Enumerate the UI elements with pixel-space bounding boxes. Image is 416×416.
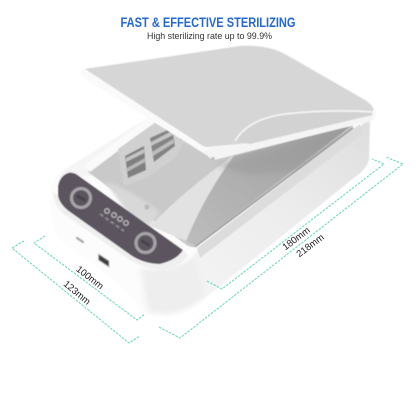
- white upper wall: [84, 116, 156, 172]
- lid curve highlight: [235, 111, 373, 141]
- interior: [88, 118, 362, 258]
- interior back wall and floor: [88, 118, 353, 247]
- dimension: 180mm: 180mm: [281, 225, 313, 253]
- control panel: [53, 173, 188, 269]
- lid white edge: [80, 46, 376, 159]
- device: sterilizer box: [50, 46, 376, 316]
- usb port: [98, 254, 109, 267]
- lid: [80, 46, 376, 160]
- title: FAST & EFFECTIVE STERILIZING: [120, 15, 296, 30]
- shadow under front corner: [140, 258, 205, 314]
- right side wall: [165, 118, 370, 312]
- indicator labels: [100, 214, 124, 231]
- indicator lights: [105, 209, 128, 225]
- compartment slots: [118, 122, 190, 186]
- right button: [136, 234, 155, 252]
- peg: [144, 204, 150, 210]
- panel rim highlight: [53, 192, 188, 269]
- lid hinge tip: [211, 157, 215, 160]
- inner rim line: [197, 124, 362, 258]
- subtitle: High sterilizing rate up to 99.9%: [147, 30, 272, 41]
- darker floor wedge: [186, 125, 352, 246]
- light floor area: [150, 155, 234, 241]
- box body: [50, 116, 370, 316]
- dimension: 180mm: [207, 159, 384, 289]
- dimension: 218mm: [159, 157, 403, 338]
- shadow under lid: [215, 128, 350, 175]
- left button: [72, 188, 90, 208]
- dimension: 100mm: [34, 236, 145, 320]
- light floor front: [105, 181, 184, 243]
- dimension: 123mm: 123mm: [61, 279, 92, 308]
- indicator slot: [77, 238, 83, 242]
- dimension: 123mm: [12, 241, 140, 343]
- lid top surface: [85, 46, 373, 147]
- lid front strip: [202, 114, 374, 160]
- dimension: 100mm: 100mm: [74, 264, 105, 292]
- dimension: 218mm: 218mm: [295, 232, 327, 260]
- lid lower panel: [236, 111, 373, 144]
- top rim: [58, 116, 200, 178]
